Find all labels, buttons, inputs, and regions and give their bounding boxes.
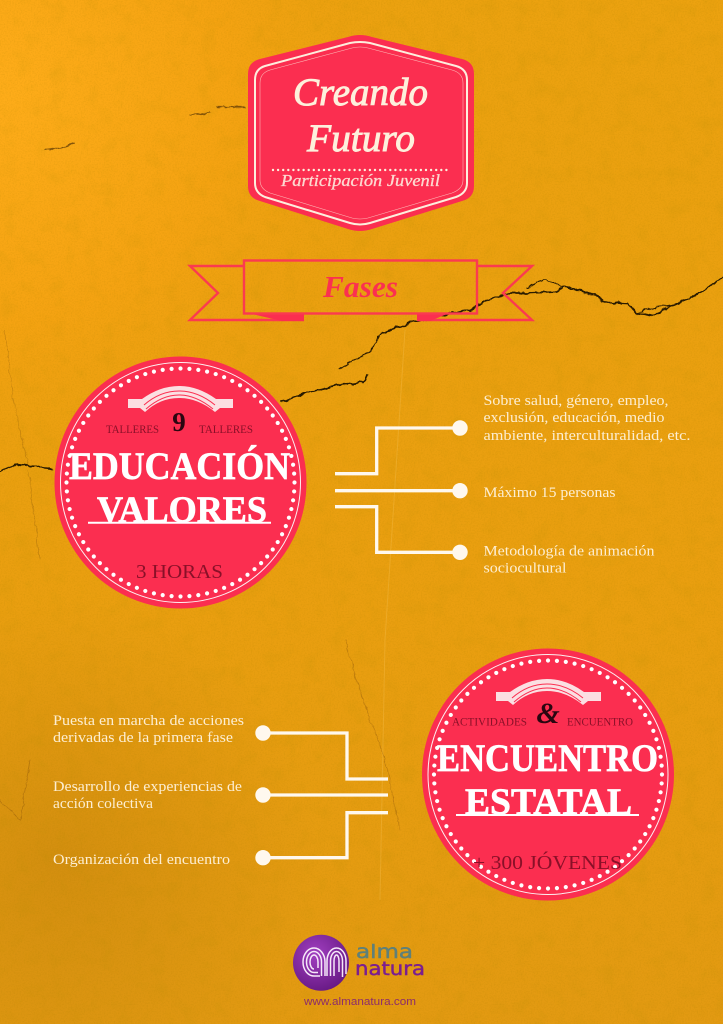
connector: phase one [335, 420, 468, 560]
label row: 9 [172, 407, 186, 437]
main heading: ENCUENTRO [437, 737, 658, 780]
text: phase one details: sociocultural [484, 561, 566, 577]
subtitle: Participación Juvenil [280, 171, 440, 190]
text: phase two details [53, 713, 244, 868]
label row: ENCUENTRO [567, 715, 633, 729]
text: phase one details: Máximo 15 personas [484, 485, 616, 501]
connector: phase two [255, 725, 388, 865]
text: phase two details: Puesta en marcha de acciones [53, 713, 244, 729]
text: phase one details: Sobre salud, género, empleo, [484, 393, 668, 409]
sub heading: ESTATAL [465, 782, 632, 823]
label row: ACTIVIDADES [452, 715, 527, 729]
text: phase one details [484, 393, 690, 577]
sub heading: VALORES [97, 490, 267, 531]
text: phase two details: derivadas de la primera fase [53, 730, 233, 746]
text: phase one details: ambiente, interculturalidad, etc. [484, 428, 690, 444]
label row: & [536, 697, 560, 730]
text: phase two details: Organización del encuentro [53, 852, 230, 868]
label row: TALLERES [106, 422, 159, 436]
text: phase one details: Metodología de animación [484, 544, 655, 560]
title badge [248, 35, 474, 231]
icon: purple circle monogram [293, 935, 349, 991]
wordmark: alma [356, 941, 413, 963]
duration: 3 HORAS [136, 561, 223, 583]
ribbon label: Fases [322, 269, 398, 304]
faint vertical scratch [380, 330, 405, 900]
stamp: Educación Valores [54, 356, 306, 608]
text: phase two details: Desarrollo de experiencias de [53, 779, 242, 795]
text: phase two details: acción colectiva [53, 796, 154, 812]
wordmark [355, 941, 425, 980]
label row: TALLERES [199, 422, 253, 436]
label row [106, 407, 253, 437]
participants: + 300 JÓVENES [473, 850, 622, 874]
stamp: Encuentro Estatal [422, 648, 674, 900]
title text: Creando [293, 71, 428, 114]
wall cracks [0, 107, 723, 830]
logo: Alma Natura [293, 935, 425, 1008]
text: phase one details: exclusión, educación, medio [484, 410, 664, 426]
wordmark: natura [355, 958, 425, 980]
website: www.almanatura.com [303, 996, 416, 1008]
ribbon heading: Fases [190, 260, 532, 321]
title text [293, 71, 428, 160]
label row [452, 697, 633, 730]
main heading: EDUCACIÓN [69, 444, 290, 488]
decorative arch [128, 386, 233, 412]
decorative arch [496, 679, 601, 705]
title text: Futuro [306, 117, 415, 160]
